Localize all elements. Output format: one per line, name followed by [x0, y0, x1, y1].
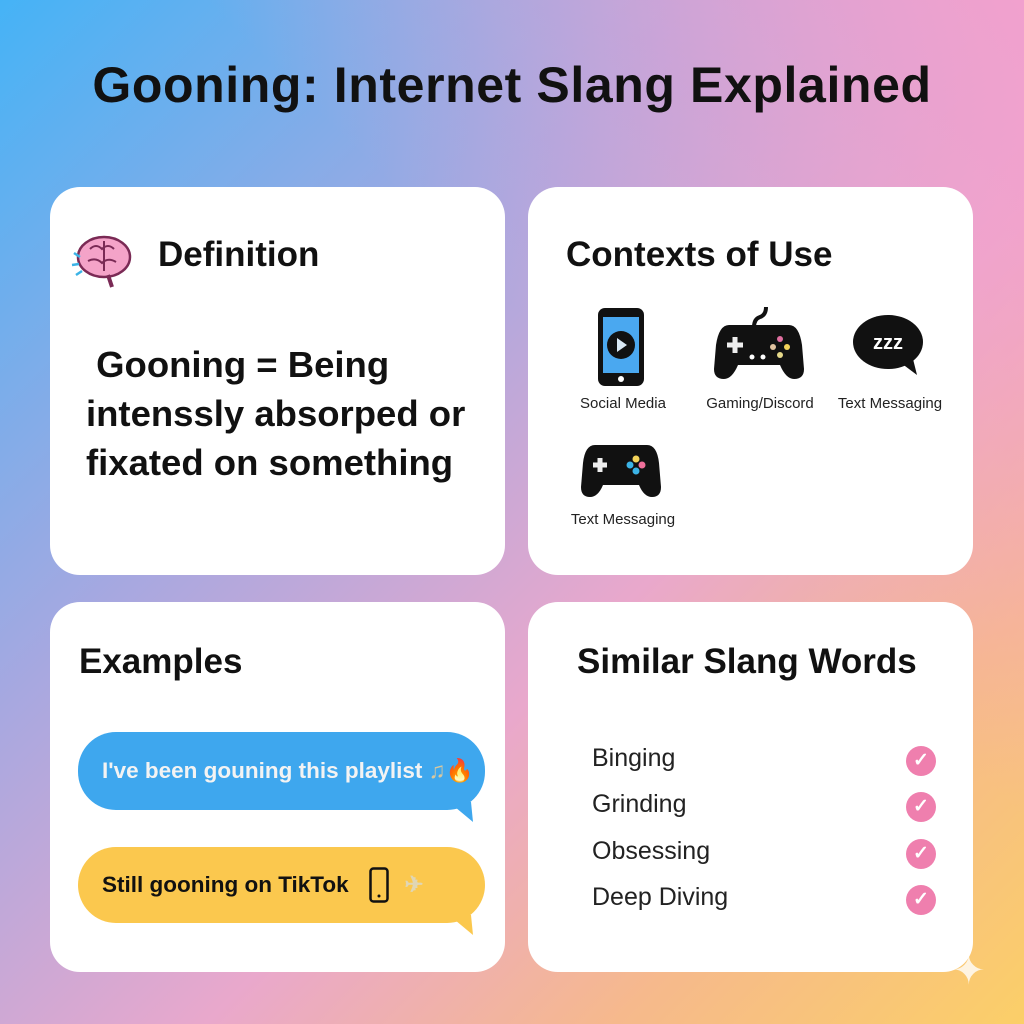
definition text: [86, 344, 465, 483]
sparkle: ✦: [952, 949, 986, 993]
heading: similar: Similar Slang Words: [577, 642, 917, 681]
label: Text Messaging: [838, 395, 942, 412]
bubble: yellow: ✈: [405, 872, 424, 897]
list: Grinding: [592, 790, 686, 818]
heading: contexts: Contexts of Use: [566, 235, 832, 274]
list: ✓: [913, 889, 929, 910]
heading: examples: Examples: [79, 642, 242, 681]
definition text: Gooning = Being: [96, 344, 389, 385]
panel: definition: [50, 187, 505, 575]
icon: zzz bubble: zzz: [873, 332, 903, 354]
panel: examples: [50, 602, 505, 972]
list: ✓: [913, 796, 929, 817]
bubble: blue: [78, 732, 485, 810]
label: Gaming/Discord: [706, 395, 814, 412]
list: ✓: [913, 750, 929, 771]
list: Binging: [592, 744, 675, 772]
bubble: yellow: [78, 847, 485, 923]
label: Text Messaging: [571, 511, 675, 528]
icon: brain: [72, 236, 132, 288]
icon: zzz bubble: [853, 315, 923, 375]
label: Social Media: [580, 395, 666, 412]
definition text: intenssly absorped or: [86, 393, 465, 434]
panel: similar slang: [528, 602, 973, 972]
icon: phone: [598, 308, 644, 386]
icon: gamepad 2: [581, 445, 661, 497]
list: [592, 744, 936, 915]
panel: contexts: [528, 187, 973, 575]
list: ✓: [913, 843, 929, 864]
bubble: blue: 🔥: [446, 758, 474, 783]
icon: gamepad: [714, 307, 804, 379]
list: Deep Diving: [592, 883, 728, 911]
list: Obsessing: [592, 837, 710, 865]
definition text: fixated on something: [86, 442, 453, 483]
title: Gooning: Internet Slang Explained: [92, 57, 932, 113]
bubble: blue: ♫: [429, 758, 446, 783]
bubble: blue: I've been gouning this playlist: [102, 758, 422, 783]
heading: definition: Definition: [158, 235, 319, 274]
bubble: yellow: Still gooning on TikTok: [102, 872, 349, 897]
